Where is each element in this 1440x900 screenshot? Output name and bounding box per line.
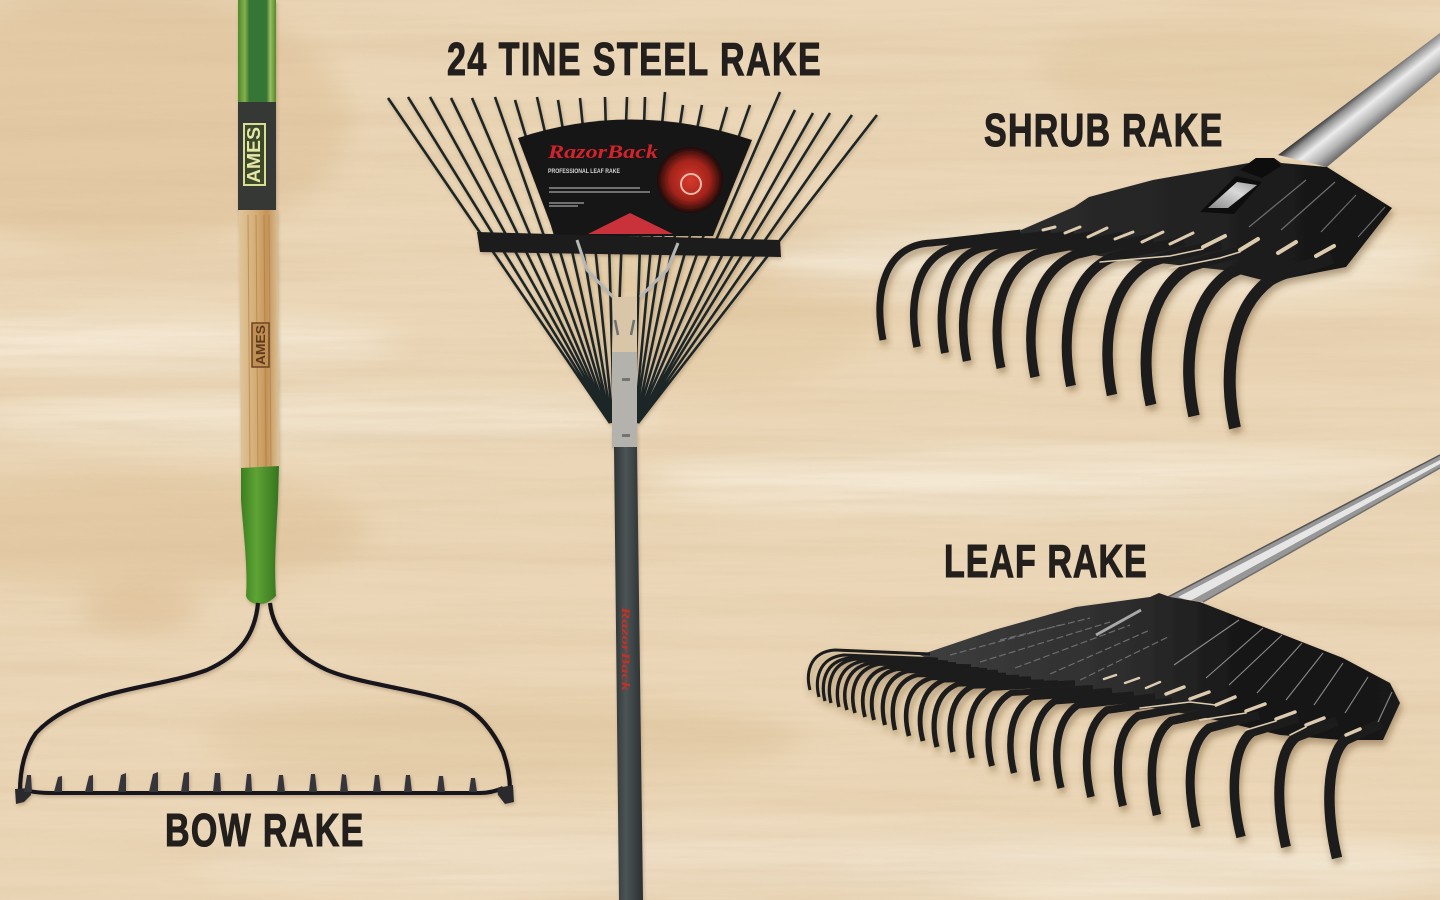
bow rake green collar (241, 466, 279, 604)
product card: PROFESSIONAL LEAF RAKE (548, 169, 620, 175)
label: shrub rake: SHRUB RAKE (984, 104, 1222, 156)
shrub rake tines (880, 233, 1332, 428)
bow rake handle (238, 0, 279, 480)
wire brace (577, 240, 678, 297)
bow rake end caps (15, 785, 514, 804)
leaf rake slot and ridges (950, 610, 1392, 722)
shrub rake slots (1043, 227, 1334, 268)
shrub rake head (1021, 158, 1392, 282)
leaf rake slots (1104, 675, 1360, 735)
steel rake handle (614, 447, 643, 900)
shrub rake window (1200, 158, 1281, 214)
label: 24 tine steel rake: 24 TINE STEEL RAKE (447, 33, 821, 85)
steel rake handle: RazorBack (619, 605, 633, 691)
bow rake bow frame (20, 603, 510, 793)
bow rake (15, 0, 514, 804)
product card (518, 119, 752, 236)
bow rake handle: AMES (253, 325, 268, 365)
steel tines (388, 92, 877, 423)
shrub rake (880, 33, 1440, 428)
shrub rake handle (1278, 33, 1440, 167)
bow rake teeth (24, 772, 477, 792)
product card: RazorBack (547, 142, 659, 163)
label: bow rake: BOW RAKE (165, 804, 363, 856)
label: leaf rake: LEAF RAKE (944, 535, 1147, 587)
leaf rake handle (1168, 455, 1440, 602)
leaf rake head (920, 593, 1400, 740)
bow rake handle: AMES (244, 127, 264, 183)
leaf rake (808, 455, 1440, 858)
ferrule (612, 297, 637, 448)
leaf rake tines (808, 650, 1382, 858)
cross bar (477, 232, 781, 257)
24 tine steel rake (388, 92, 877, 900)
